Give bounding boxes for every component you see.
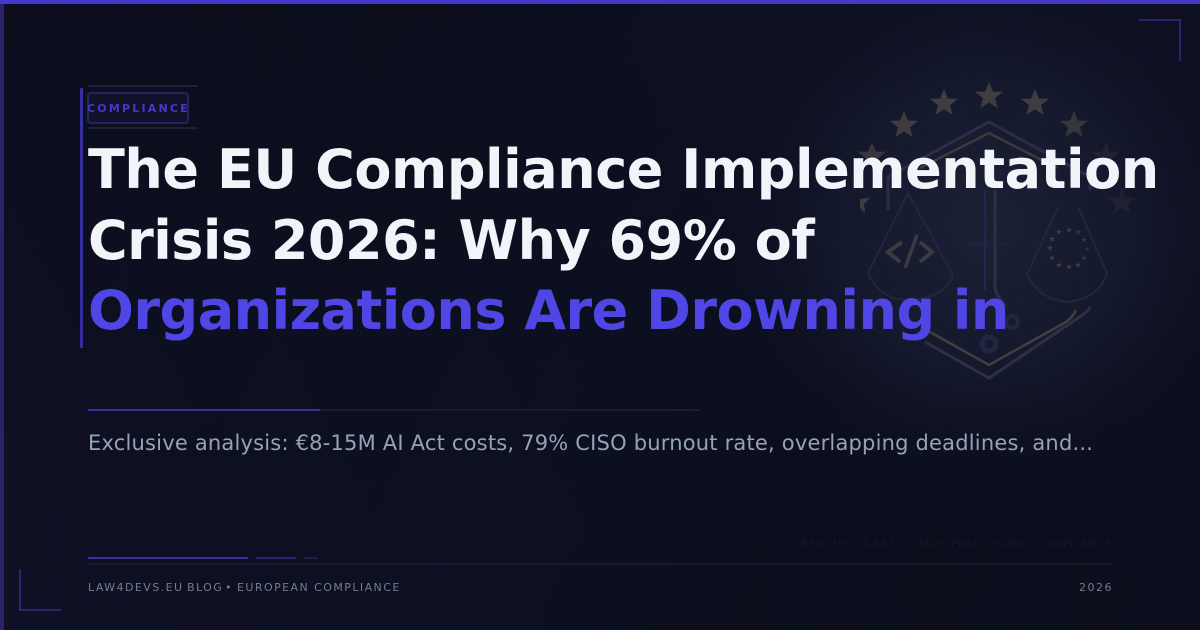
footer right year: 2026	[1079, 581, 1113, 594]
corner bracket: top right	[1139, 19, 1181, 61]
title: Crisis 2026: Why 69% of	[88, 208, 814, 272]
badge rule top	[88, 85, 198, 87]
shield outline	[888, 122, 1090, 378]
badge label: COMPLIANCE	[87, 102, 190, 115]
faint regulation label: REG. (EU) &#8212; EUROPEAN DIGITAL COMPLIANCE	[801, 539, 1112, 550]
footer rule	[88, 563, 1112, 565]
footer left text	[88, 581, 401, 594]
footer left text: EUROPEAN COMPLIANCE	[237, 581, 401, 594]
divider	[88, 409, 700, 411]
title	[88, 138, 1159, 342]
title accent rule	[80, 88, 83, 348]
corner bracket: bottom left	[19, 569, 61, 611]
footer left text: •	[225, 581, 233, 594]
footer left text: LAW4DEVS.EU	[88, 581, 183, 594]
badge: compliance	[87, 92, 189, 124]
footer progress segments	[88, 557, 318, 559]
title: Organizations Are Drowning in	[88, 279, 1009, 342]
top accent bar	[0, 0, 1200, 4]
left edge bar	[0, 4, 4, 630]
code icon	[888, 235, 932, 268]
small EU stars	[1047, 227, 1090, 270]
scales	[868, 190, 1107, 351]
emblem: EU stars, shield and scales	[858, 82, 1135, 380]
footer left text: BLOG	[187, 581, 223, 594]
star fragment	[860, 198, 870, 213]
badge rule bottom	[88, 127, 198, 129]
stars ring	[858, 82, 1136, 214]
subtitle: Exclusive analysis: €8-15M AI Act costs, 79% CISO burnout rate, overlapping deadlines, and...	[88, 431, 1093, 455]
title: The EU Compliance Implementation	[88, 138, 1159, 201]
